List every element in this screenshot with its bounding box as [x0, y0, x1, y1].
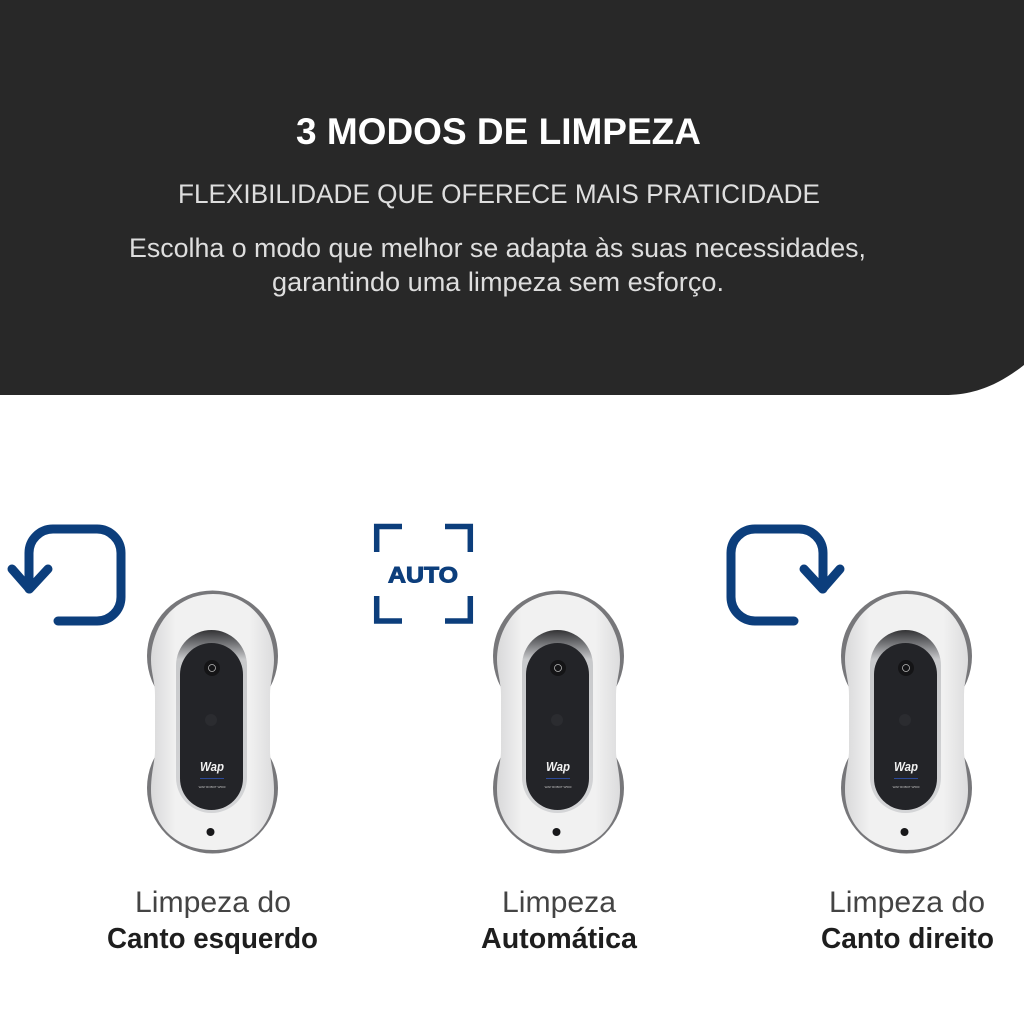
- robot: left: Wap: [200, 759, 224, 774]
- subtitle: FLEXIBILIDADE QUE OFERECE MAIS PRATICIDADE: [178, 179, 820, 209]
- label: left corner cleaning: Canto esquerdo: [107, 923, 318, 955]
- label: right corner cleaning: Canto direito: [821, 923, 994, 955]
- description: garantindo uma limpeza sem esforço.: [272, 267, 724, 297]
- label: automatic cleaning: Automática: [481, 923, 638, 955]
- robot: left: WAP ROBOT W500: [199, 785, 226, 789]
- label: right corner cleaning: Limpeza do: [829, 886, 985, 919]
- robot: right: [841, 590, 972, 854]
- icon: left corner arrow: [12, 529, 121, 621]
- icon: auto: AUTO: [388, 562, 458, 588]
- header band: [0, 0, 1024, 395]
- robot: center: [493, 590, 624, 854]
- label: right corner cleaning: [821, 886, 994, 955]
- icon: auto: [377, 526, 470, 621]
- label: automatic cleaning: Limpeza: [502, 886, 616, 919]
- robot: right: Wap: [894, 759, 918, 774]
- label: left corner cleaning: [107, 886, 318, 955]
- label: automatic cleaning: [481, 886, 638, 955]
- robot: center: WAP ROBOT W500: [545, 785, 572, 789]
- robot: center: Wap: [546, 759, 570, 774]
- robot: right: WAP ROBOT W500: [893, 785, 920, 789]
- description: [129, 233, 866, 297]
- label: left corner cleaning: Limpeza do: [135, 886, 291, 919]
- title: 3 MODOS DE LIMPEZA: [296, 111, 701, 152]
- description: Escolha o modo que melhor se adapta às suas necessidades,: [129, 233, 866, 263]
- icon: right corner arrow: [731, 529, 840, 621]
- robot: left: [147, 590, 278, 854]
